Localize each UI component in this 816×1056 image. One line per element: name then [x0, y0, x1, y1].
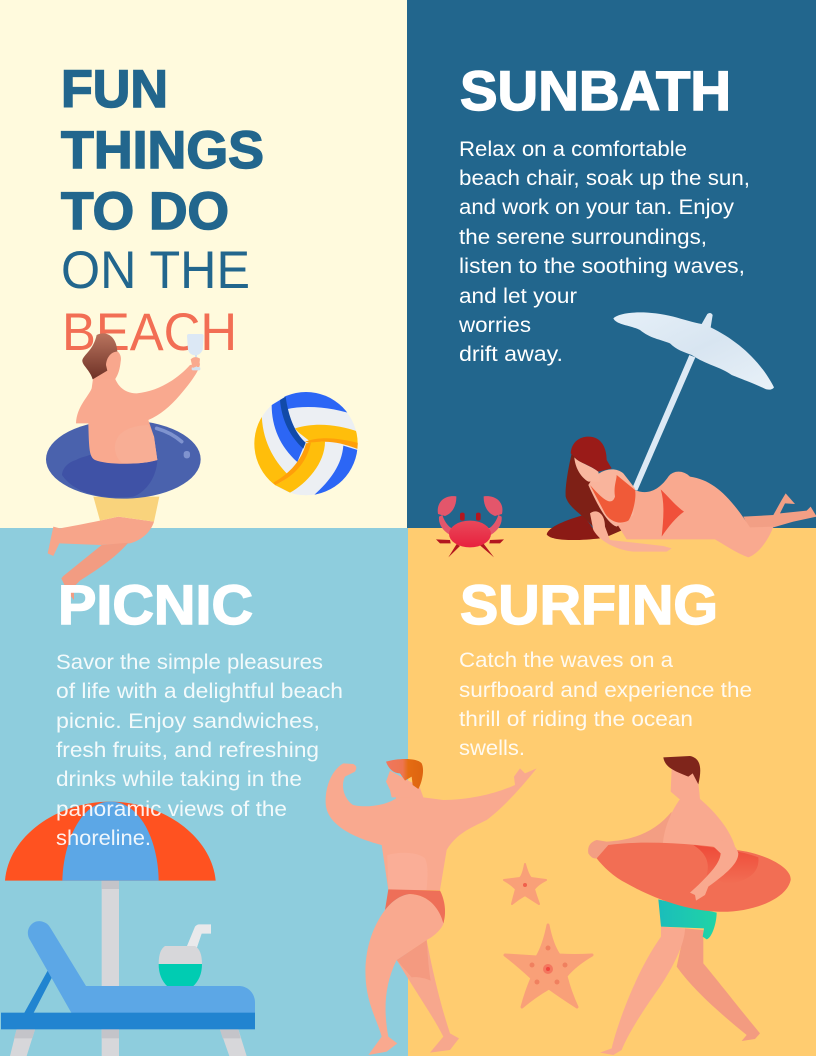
icon: flexing man [326, 759, 537, 1055]
panel: surfing background [408, 528, 816, 1056]
text block: picnic description: drinks while taking in the [56, 768, 302, 791]
text block: sunbath description: listen to the soothing waves, [459, 255, 745, 278]
heading: surfing: SURFING [460, 573, 718, 636]
text block: picnic description: picnic. Enjoy sandwiches, [56, 710, 320, 733]
text block: picnic description: shoreline. [56, 827, 151, 850]
text block: surfing description [459, 649, 752, 760]
panel: picnic background [0, 528, 408, 1056]
text block: sunbath description: beach chair, soak up the sun, [459, 167, 750, 190]
title [61, 60, 264, 362]
heading: sunbath: SUNBATH [460, 59, 731, 122]
umbrella pole [102, 880, 119, 1056]
text block: sunbath description: and let your [459, 285, 577, 308]
icon: beach umbrella, lounger and drink [1, 802, 255, 1056]
icon: man carrying surfboard [588, 756, 791, 1055]
lounger [24, 971, 53, 1013]
text block: picnic description: of life with a delightful beach [56, 680, 343, 703]
umbrella canopy [5, 802, 216, 881]
text block: sunbath description: the serene surroundings, [459, 226, 707, 249]
drink [186, 924, 211, 948]
heading: picnic: PICNIC [58, 573, 253, 636]
text block: surfing description: thrill of riding the ocean [459, 708, 693, 731]
title: FUN [61, 60, 168, 119]
text block: surfing description: Catch the waves on a [459, 649, 673, 672]
title: TO DO [61, 182, 229, 241]
text block: sunbath description: worries [458, 314, 531, 337]
title: THINGS [61, 121, 264, 180]
panel: cream title background [0, 0, 407, 528]
text block: sunbath description: drift away. [459, 343, 563, 366]
panel: sunbath background [407, 0, 816, 528]
text block: surfing description: surfboard and experience the [459, 679, 752, 702]
text block: picnic description: panoramic views of the [56, 798, 287, 821]
icon: sunbathing woman [547, 437, 816, 557]
title: ON THE [61, 241, 250, 300]
title: BEACH [62, 303, 237, 362]
icon: man in swim ring with glass [46, 333, 204, 600]
icon: small starfish [504, 864, 546, 904]
text block: sunbath description: Relax on a comfortable [459, 138, 687, 161]
lounger legs [10, 1029, 35, 1056]
text block: surfing description: swells. [459, 737, 525, 760]
text block: sunbath description: and work on your tan. Enjoy [459, 196, 735, 219]
icon: volleyball [254, 392, 358, 496]
text block: picnic description [56, 651, 343, 850]
text block: sunbath description [458, 138, 750, 366]
text block: picnic description: fresh fruits, and refreshing [56, 739, 319, 762]
icon: beach umbrella behind sunbather [613, 312, 774, 491]
text block: picnic description: Savor the simple pleasures [56, 651, 323, 674]
icon: large starfish [505, 925, 592, 1007]
icon: crab [436, 496, 504, 557]
